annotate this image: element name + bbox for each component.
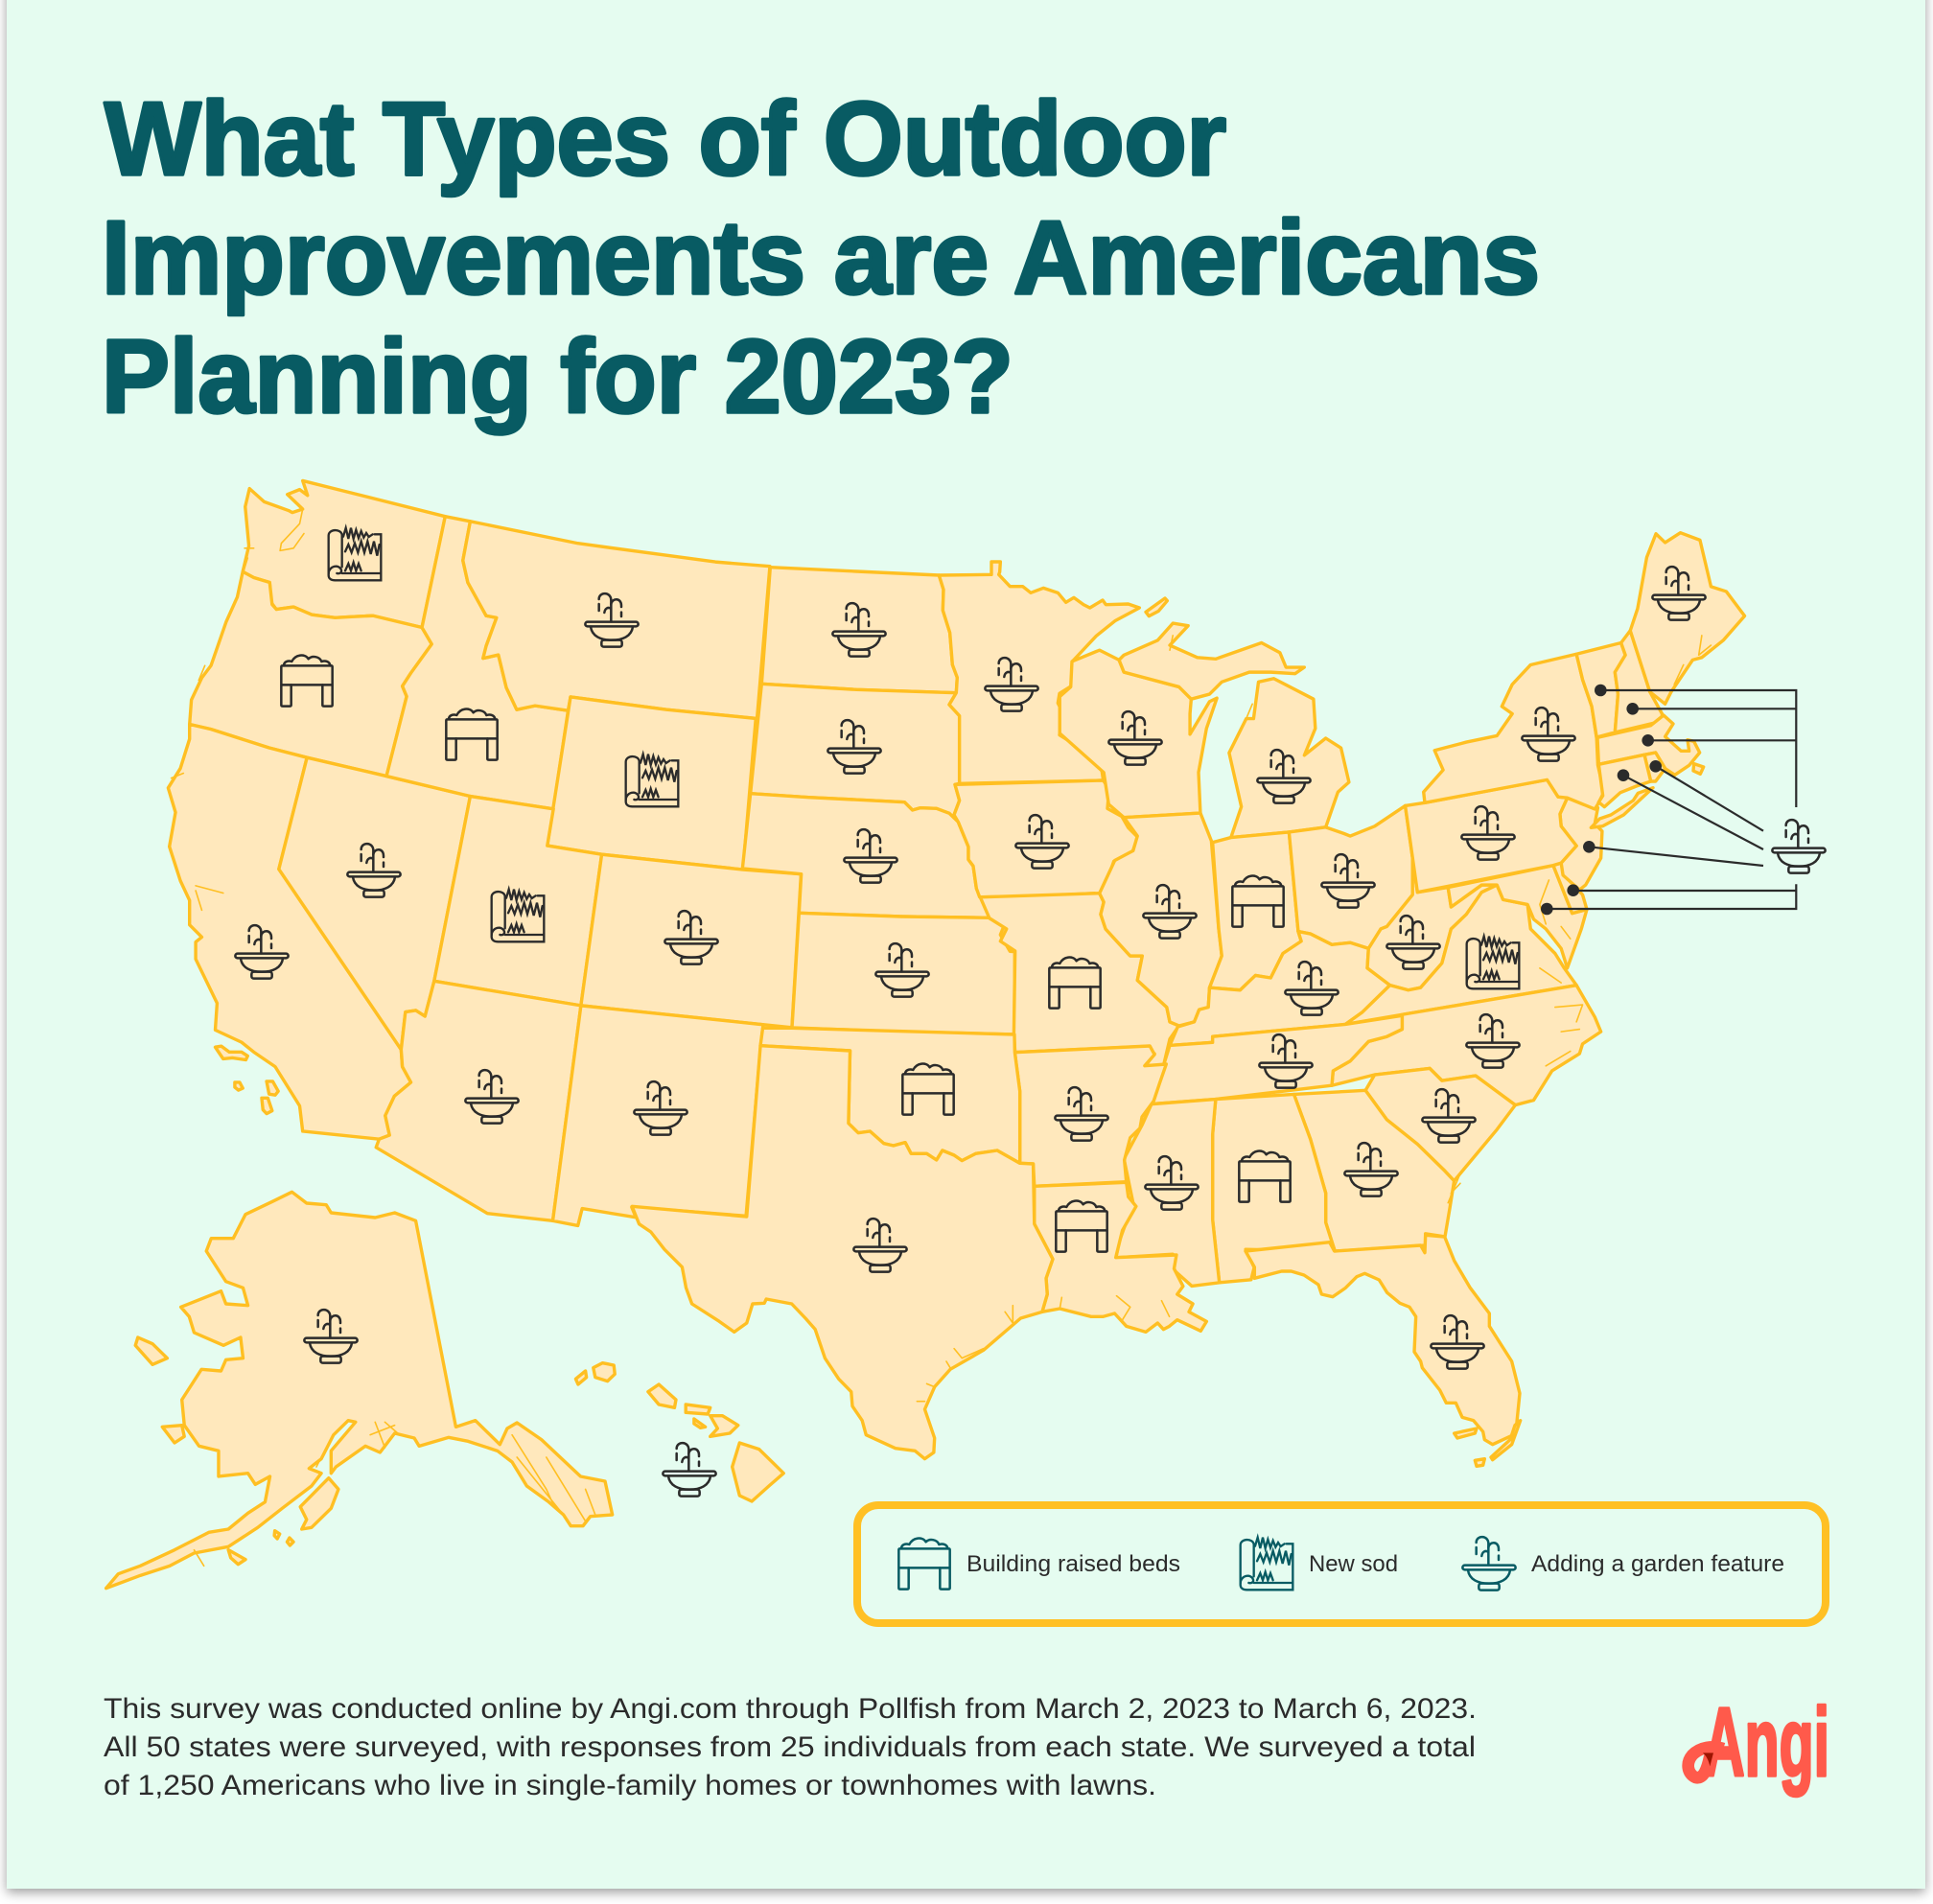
icon: fountain, Northeast callout [1772,820,1826,873]
state: Iowa [954,780,1138,901]
icon: fountain, Nebraska [844,829,897,883]
state: Massachusetts [1597,715,1700,775]
map: United States [106,480,1745,1589]
state: Illinois [1100,813,1222,1026]
state: Ohio [1289,805,1412,948]
legend label: sod: New sod [1309,1551,1398,1577]
icon: raised bed, Oregon [281,656,333,707]
icon: raised bed, Indiana [1232,876,1284,927]
Florida keys [1491,1421,1521,1460]
icon: fountain, Arkansas [1055,1087,1108,1141]
map icons: adding a garden feature [235,567,1826,1497]
title: Planning for 2023? [102,318,1013,435]
state: Tennessee [1152,1015,1402,1104]
state: Utah [434,797,602,1006]
icon: raised bed, Missouri [1049,958,1101,1009]
icon: fountain, Mississippi [1145,1156,1199,1210]
Isle Royale [1146,598,1167,616]
icon: fountain, Arizona [465,1070,519,1124]
survey methodology note [104,1693,1477,1801]
state: Washington [243,480,445,627]
state: Hawaii [575,1363,783,1501]
western states [168,480,801,1225]
southern central states [632,1028,1206,1459]
state: New Hampshire [1615,631,1662,732]
icon: fountain, Colorado [664,911,718,964]
state: New York [1424,654,1604,809]
state: Georgia [1293,1090,1455,1252]
legend label: raised beds: Building raised beds [966,1551,1180,1577]
survey methodology note: All 50 states were surveyed, with responses from 25 individuals from each state. We surveyed a total [104,1731,1476,1763]
state: Oregon [190,571,431,777]
state: North Dakota [761,568,957,693]
Puget Sound detail [172,509,304,910]
state: North Carolina [1332,986,1601,1105]
icon: raised bed, Alabama [1239,1151,1291,1202]
icon: fountain, Hawaii [663,1443,716,1497]
logo: Angi: Angi [1704,1689,1829,1797]
state: Connecticut [1598,755,1651,807]
icon: fountain, South Carolina [1422,1089,1476,1143]
Gulf coast inlets detail [917,1296,1170,1402]
state: Michigan lower peninsula [1229,679,1349,838]
icon: fountain, North Carolina [1466,1014,1520,1068]
state: Montana [463,522,770,718]
title [102,81,1540,435]
state: Idaho [386,517,568,809]
icon: fountain, New York [1522,708,1575,761]
icon: fountain, Kansas [875,943,929,997]
icon: sod, Washington [329,528,381,580]
state: Arkansas [1014,1046,1166,1186]
state: Nebraska [742,794,990,917]
icon: fountain, Tennessee [1259,1034,1313,1088]
state: Maryland [1448,866,1587,968]
state: Nevada [279,757,470,1050]
state: Kansas [792,913,1014,1034]
legend icon: raised bed [898,1539,950,1590]
logo: Angi [1688,1689,1829,1797]
icon: fountain, Texas [853,1219,907,1272]
state: Michigan upper peninsula [1119,623,1304,699]
icon: fountain, South Dakota [827,720,881,774]
icon: raised bed, Louisiana [1056,1201,1107,1252]
state: Alaska [106,1192,613,1589]
icon: fountain, Pennsylvania [1461,806,1515,860]
icon: fountain, North Dakota [832,603,886,657]
state: California [168,725,411,1139]
state: Arizona [376,981,581,1220]
icon: fountain, Illinois [1143,885,1197,939]
icon: fountain, Ohio [1321,854,1375,908]
state: Wyoming [547,697,756,870]
legend icon: sod [1241,1538,1293,1590]
state: South Dakota [751,684,960,822]
survey methodology note: This survey was conducted online by Angi.com through Pollfish from March 2, 2023 to March 6, 2023. [104,1693,1477,1725]
state: Delaware [1553,863,1587,914]
coastal inlets detail [1170,636,1711,1203]
icon: fountain, Florida [1431,1315,1484,1369]
icon: fountain, Iowa [1015,815,1069,869]
state: Mississippi [1116,1100,1220,1286]
icon: fountain, Georgia [1344,1143,1398,1196]
California islands [215,1046,278,1114]
state: Maine [1630,533,1745,704]
state: Kentucky [1170,932,1390,1045]
title: Improvements are Americans [102,199,1540,316]
icon: fountain, Minnesota [985,658,1038,711]
state: Oklahoma [760,1028,1020,1163]
state: New Jersey [1560,798,1602,890]
icon: fountain, West Virginia [1386,916,1440,969]
Long Island [1591,788,1653,827]
legend label: garden feature: Adding a garden feature [1531,1551,1784,1577]
state: New Mexico [553,1006,763,1225]
icon: fountain, New Mexico [634,1081,687,1135]
map icons: building raised beds [281,656,1291,1252]
state: Wisconsin [1060,650,1217,818]
icon: sod, Wyoming [626,755,678,806]
southern New England [1591,715,1704,827]
state: Colorado [581,854,801,1028]
icon: raised bed, Oklahoma [902,1064,954,1115]
state: Minnesota [939,562,1139,783]
icon: fountain, Kentucky [1285,962,1339,1015]
legend icon: fountain [1462,1537,1516,1591]
icon: fountain, Maine [1652,567,1706,620]
state: Louisiana [1035,1182,1206,1332]
icon: fountain, Montana [585,593,639,647]
state: Virginia [1345,885,1576,1024]
state: West Virginia [1367,858,1497,990]
Alaska and Hawaii [106,1192,783,1589]
leader lines: small northeast states to shared fountain icon [1541,685,1796,915]
icon: sod, Utah [492,890,544,941]
icon: sod, Virginia [1467,937,1519,988]
central plains states [742,562,1167,1034]
state: South Carolina [1365,1068,1515,1181]
survey methodology note: of 1,250 Americans who live in single-family homes or townhomes with lawns. [104,1770,1156,1801]
state: Missouri [980,894,1179,1066]
icon: fountain, Wisconsin [1108,711,1162,765]
eastern states [980,533,1745,1286]
icon: fountain, Alaska [304,1310,358,1363]
state: Vermont [1576,643,1625,737]
icon: fountain, Nevada [347,844,401,897]
legend [857,1505,1826,1623]
state: Texas [632,1046,1053,1459]
state: Indiana [1209,832,1301,990]
state: Alabama [1213,1094,1335,1283]
Nantucket [1693,764,1704,774]
icon: fountain, Michigan [1257,750,1311,803]
map icons: new sod [329,528,1519,988]
icon: fountain, California [235,925,289,979]
state: Pennsylvania [1406,779,1576,893]
icon: raised bed, Idaho [446,709,498,760]
state: Florida [1246,1235,1521,1466]
title: What Types of Outdoor [105,81,1226,197]
state: Rhode Island [1644,753,1665,781]
